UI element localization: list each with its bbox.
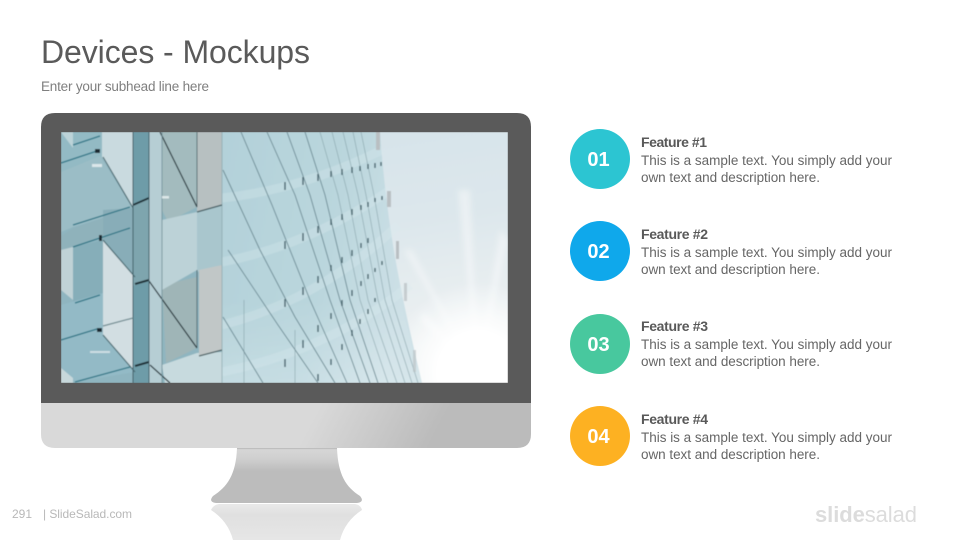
building stepped edge (376, 132, 416, 372)
feature 4 text: own text and description here. (641, 447, 820, 462)
feature 3 text: This is a sample text. You simply add your (641, 337, 892, 352)
feature 1 text (641, 134, 892, 185)
subhead: Enter your subhead line here (41, 79, 209, 94)
monitor mockup (41, 113, 531, 540)
grey glass panels (162, 132, 197, 222)
left light panels (102, 132, 133, 208)
left dark lines (133, 132, 222, 383)
feature 1 (570, 129, 892, 189)
feature 2 (570, 221, 892, 281)
footer page number: 291 (12, 507, 32, 521)
feature 2 text (641, 226, 892, 277)
footer brand text: | SlideSalad.com (43, 507, 132, 521)
feature 3 text: own text and description here. (641, 354, 820, 369)
monitor stand (211, 448, 362, 503)
building facade (222, 132, 422, 383)
dark column (133, 132, 149, 383)
facade ticks (285, 162, 382, 381)
monitor chin (41, 403, 531, 448)
badge 01 (570, 129, 630, 189)
feature 4 text: Feature #4 (641, 411, 708, 427)
feature 1 text: own text and description here. (641, 170, 820, 185)
left glass: base (61, 132, 222, 383)
feature 1 text: This is a sample text. You simply add your (641, 153, 892, 168)
feature 2 text: This is a sample text. You simply add your (641, 245, 892, 260)
badge 04 (570, 406, 630, 466)
facade bands (222, 154, 368, 328)
feature 4 (570, 406, 892, 466)
screen photo: glass building (61, 132, 508, 383)
feature 3 text: Feature #3 (641, 318, 708, 334)
feature 3 text (641, 318, 892, 369)
monitor bezel (41, 113, 531, 403)
feature 2 text: Feature #2 (641, 226, 708, 242)
feature 1 text: Feature #1 (641, 134, 707, 150)
badge 03 (570, 314, 630, 374)
glints and joints (90, 164, 169, 353)
facade lines (223, 132, 378, 383)
badge 03: 03 (587, 334, 610, 356)
monitor stand reflection (211, 504, 362, 540)
feature 2 text: own text and description here. (641, 262, 820, 277)
logo: slidesalad: slidesalad (815, 502, 917, 527)
badge 02: 02 (587, 241, 610, 263)
sun rays (410, 190, 508, 269)
left teal lines (61, 136, 222, 382)
feature 3 (570, 314, 892, 374)
badge 04: 04 (587, 426, 610, 448)
title: Devices - Mockups (41, 34, 310, 70)
badge 01: 01 (587, 149, 610, 171)
grey vertical panels (197, 132, 222, 212)
feature 4 text: This is a sample text. You simply add your (641, 430, 892, 445)
feature 4 text (641, 411, 892, 462)
badge 02 (570, 221, 630, 281)
